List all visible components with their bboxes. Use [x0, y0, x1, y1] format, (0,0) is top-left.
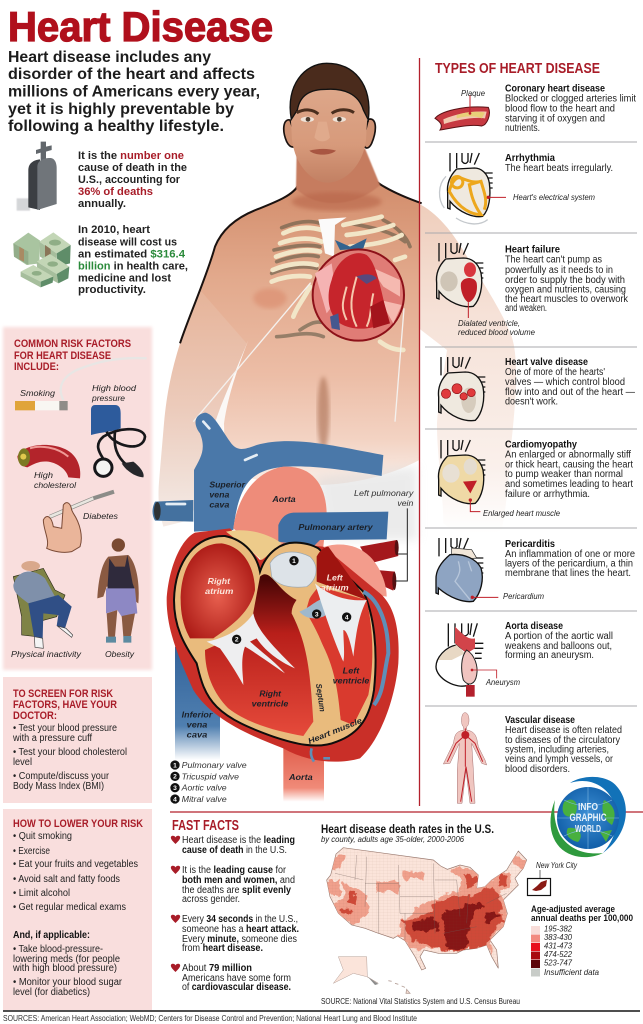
icon: hand with syringe: [43, 492, 114, 552]
panel: screening for risk factors: [3, 677, 152, 803]
heart muscle wall: [174, 536, 376, 746]
item: pericarditis: [436, 538, 635, 602]
intro paragraph: [8, 49, 260, 135]
numbered valve markers: 3: [315, 611, 319, 618]
item: heart valve disease: flow into and out of the heart —: [505, 387, 635, 398]
fact: cost of heart disease: In 2010, heart: [78, 224, 150, 236]
fact: men and women: It is the leading cause for: [182, 865, 287, 876]
label: high blood pressure: High blood: [92, 383, 136, 393]
intro paragraph: yet it is highly preventable by: [8, 101, 234, 118]
pulmonary valve: [270, 552, 316, 587]
valve legend: 4: [173, 796, 177, 803]
numbered valve markers: 1: [292, 558, 296, 565]
heading: risk factors: INCLUDE:: [14, 361, 59, 373]
eyebrows and eyes: [297, 110, 354, 155]
county rate regions: [327, 854, 526, 956]
map source: SOURCE: National Vital Statistics System and U.S. Census Bureau: [321, 997, 520, 1006]
coronary veins on right edge: [363, 592, 388, 705]
item: cardiomyopathy: Cardiomyopathy: [505, 440, 577, 451]
anatomy labels: Pulmonary artery: [298, 523, 373, 532]
fact: number one cause of death: It is the number one: [78, 150, 184, 162]
item: cardiomyopathy: [438, 440, 633, 518]
item: coronary heart disease: Plaque: [461, 88, 485, 98]
fact: every 34 seconds: someone has a heart attack.: [182, 924, 299, 935]
icon: stacks of money: [13, 232, 71, 287]
fact: every 34 seconds: from heart disease.: [182, 943, 263, 954]
anatomy labels: Aorta: [271, 495, 296, 504]
icon: clogged artery: [17, 445, 80, 478]
item: coronary heart disease: blood flow to the heart and: [505, 104, 615, 115]
list: screening steps: • Test your blood pressure: [13, 723, 117, 734]
item: cardiomyopathy: Enlarged heart muscle: [483, 508, 560, 518]
lower aorta: [283, 747, 324, 802]
fact: number one cause of death: [78, 150, 187, 210]
list: medical steps: level (for diabetics): [13, 987, 90, 998]
label: dilated ventricle: Dialated ventricle,: [458, 318, 520, 328]
item: vascular disease: system, including arteries,: [505, 745, 609, 756]
item: aorta disease: forming an aneurysm.: [505, 650, 594, 661]
column rule: [418, 58, 420, 806]
item: cardiomyopathy: to pump weaker than normal: [505, 469, 623, 480]
numbered valve markers: 4: [345, 614, 349, 621]
neck: [296, 148, 380, 203]
anatomy labels: vena: [209, 490, 230, 499]
anatomy labels: cava: [209, 500, 230, 509]
anatomy labels: Left: [327, 574, 343, 583]
item: vascular disease: blood disorders.: [505, 764, 570, 775]
list: medical steps: [12, 944, 123, 998]
contiguous states: [327, 848, 527, 970]
item: heart failure: the heart muscles to overwork: [505, 294, 629, 305]
fact: cost of heart disease: [78, 224, 188, 296]
heading: screening: [13, 688, 117, 722]
fact: 79 million: of cardiovascular disease.: [182, 982, 291, 993]
sternum: [318, 217, 347, 257]
right arm: [410, 200, 516, 536]
left atrium: [317, 547, 367, 600]
item: aorta disease: Aorta disease: [505, 621, 563, 632]
sources: SOURCES: American Heart Association; WebMD; Centers for Disease Control and Prevention; National Heart Lung and Blood Institute: [3, 1014, 417, 1023]
intro paragraph: millions of Americans every year,: [8, 84, 260, 100]
pulmonary veins: [360, 540, 399, 591]
panel: common risk factors: [3, 327, 152, 670]
item: heart failure: and weaken.: [505, 303, 547, 314]
label: physical inactivity: Physical inactivity: [11, 649, 82, 659]
item: arrhythmia: [440, 153, 613, 224]
panel: man's torso illustration: [159, 63, 516, 536]
shadow behind the vessels: [317, 467, 417, 540]
list: lifestyle steps: [13, 831, 138, 913]
item: coronary heart disease: starving it of oxygen and: [505, 114, 605, 125]
fact: 79 million: Americans have some form: [182, 973, 291, 984]
fact: every 34 seconds: Every 34 seconds in the U.S.,: [182, 914, 298, 925]
subheading: if applicable: And, if applicable:: [13, 930, 90, 941]
anatomy labels: vein: [397, 498, 414, 508]
aortic valve: [299, 598, 328, 618]
label: high blood pressure: pressure: [91, 393, 125, 403]
label: high cholesterol: cholesterol: [34, 480, 77, 490]
label: diabetes: Diabetes: [83, 511, 119, 521]
face: [290, 88, 368, 183]
list: screening steps: • Compute/discuss your: [13, 771, 110, 782]
panel: how to lower your risk: [3, 809, 152, 1010]
anatomy labels: Left: [343, 666, 360, 675]
anatomy labels: vena: [187, 721, 208, 730]
icon: heart with aneurysm: [436, 623, 497, 697]
valve legend: Mitral valve: [182, 794, 227, 804]
gap between arm and torso: [200, 340, 248, 473]
heart anatomy diagram: [152, 413, 417, 804]
heading: types: TYPES OF HEART DISEASE: [435, 61, 600, 77]
right atrium: [181, 543, 255, 638]
heading: risk factors: [14, 338, 131, 373]
item: vascular disease: Heart disease is often related: [505, 725, 622, 736]
label: smoking: Smoking: [20, 388, 55, 398]
hair: [290, 63, 369, 120]
item: pericarditis: layers of the pericardium, a thin: [505, 559, 633, 570]
anatomy labels: atrium: [321, 583, 349, 592]
item: coronary heart disease: Coronary heart disease: [505, 84, 605, 95]
torso and shoulders: [200, 170, 419, 485]
map legend: [531, 904, 633, 977]
ears: [284, 119, 375, 148]
callout leader lines: [193, 283, 404, 422]
right ventricle: [205, 574, 313, 736]
list: lifestyle steps: • Eat your fruits and vegetables: [13, 859, 138, 870]
left atrium exterior: [320, 545, 387, 597]
icon: heart with enlarged muscle: [438, 440, 485, 512]
fact: number one cause of death: annually.: [78, 198, 126, 210]
label: obesity: Obesity: [105, 649, 135, 659]
fatty tissue at top of heart: [226, 530, 282, 560]
valve legend: [170, 760, 247, 804]
footer rule: [3, 1010, 640, 1012]
icon: heart with highlighted valves: [438, 357, 485, 421]
icon: blood pressure cuff: [91, 405, 145, 477]
valve legend: 2: [173, 774, 177, 781]
fact: every 34 seconds: Every minute, someone dies: [182, 934, 297, 945]
item: pericarditis: An inflammation of one or more: [505, 549, 635, 560]
New York City inset: [528, 861, 578, 896]
item: heart valve disease: One of more of the hearts': [505, 367, 605, 378]
list: screening steps: level: [13, 757, 32, 768]
item: cardiomyopathy: failure or arrhythmia.: [505, 489, 590, 500]
intro paragraph: disorder of the heart and affects: [8, 66, 255, 83]
item: heart failure: The heart can't pump as: [505, 255, 602, 266]
fact: men and women: both men and women, and: [182, 875, 295, 886]
list: screening steps: [12, 723, 127, 792]
valve legend: Tricuspid valve: [182, 771, 239, 781]
list: lifestyle steps: • Exercise: [13, 846, 50, 857]
state borders: [335, 855, 507, 940]
fact: cost of heart disease: medicine and lost: [78, 272, 171, 284]
heart outer wall: [167, 528, 399, 762]
dark red counties: [412, 903, 500, 950]
county texture overlay: [327, 848, 527, 970]
list: lifestyle steps: • Quit smoking: [13, 831, 72, 842]
anatomy labels: [182, 480, 414, 782]
light red county bands: [327, 854, 526, 956]
fact: cost of heart disease: billion in health care,: [78, 260, 188, 272]
map legend: Insufficient data: [544, 967, 599, 977]
left ventricle: [307, 585, 372, 725]
heading: fast facts: FAST FACTS: [172, 818, 239, 834]
item: heart failure: [436, 243, 629, 337]
valve legend: Aortic valve: [181, 783, 227, 793]
item: arrhythmia: Heart's electrical system: [513, 192, 595, 202]
item: arrhythmia: The heart beats irregularly.: [505, 163, 613, 174]
label: dilated ventricle: reduced blood volume: [458, 327, 535, 337]
list: lifestyle steps: • Get regular medical exams: [13, 902, 126, 913]
item: pericarditis: Pericardium: [503, 591, 544, 601]
item: vascular disease: Vascular disease: [505, 715, 575, 726]
item: heart valve disease: valves — which control blood: [505, 377, 625, 388]
vessels above heart: [335, 238, 367, 250]
valve legend: 1: [173, 762, 177, 769]
list: screening steps: with a pressure cuff: [12, 733, 92, 744]
mitral valve: [315, 583, 367, 662]
anatomy labels: Superior: [209, 480, 246, 489]
list: medical steps: • Monitor your blood sugar: [13, 977, 123, 988]
label: dilated ventricle: [458, 318, 535, 337]
inferior vena cava: [175, 647, 220, 760]
list: medical steps: • Take blood-pressure-: [13, 944, 103, 955]
fact: number one cause of death: U.S., accounting for: [78, 174, 181, 186]
map subtitle: by county, adults age 35-older, 2000-2006: [321, 834, 464, 844]
item: cardiomyopathy: or thick heart, causing the heart: [505, 459, 633, 470]
map legend: 195-382: [544, 924, 572, 934]
item: aorta disease: [436, 621, 613, 697]
logo: Info Graphic World globe: GRAPHIC: [570, 812, 607, 824]
icon: man sitting in armchair: [13, 561, 73, 648]
list: lifestyle steps: • Avoid salt and fatty foods: [13, 874, 120, 885]
icon: human circulatory figure: [443, 713, 487, 803]
title: Heart Disease: [8, 3, 273, 50]
map legend: 474-522: [544, 949, 572, 959]
item: aorta disease: Aneurysm: [485, 677, 520, 687]
fact: cost of heart disease: an estimated $316.4: [78, 248, 186, 260]
fact: men and women: [171, 865, 295, 905]
anatomy labels: Right: [259, 690, 281, 699]
anatomy labels: ventricle: [252, 700, 289, 709]
heading: risk factors: FOR HEART DISEASE: [14, 350, 111, 362]
map legend: 523-747: [544, 958, 572, 968]
item: heart failure: powerfully as it needs to in: [505, 265, 613, 276]
magnified heart circle: [313, 249, 404, 341]
fact: men and women: across gender.: [182, 894, 240, 905]
anatomy labels: cava: [187, 730, 208, 739]
choropleth map of the U.S.: [327, 848, 527, 993]
item: vascular disease: [443, 713, 622, 803]
icon: cigarette and smoke: [15, 358, 147, 410]
heading: risk factors: COMMON RISK FACTORS: [14, 338, 131, 350]
logo: Info Graphic World globe: INFO: [578, 802, 598, 813]
item: heart valve disease: doesn't work.: [505, 396, 558, 408]
item: coronary heart disease: nutrients.: [505, 123, 540, 134]
heading: screening: DOCTOR:: [13, 710, 57, 722]
left arm: [159, 247, 257, 527]
item: heart failure: order to supply the body with: [505, 275, 625, 286]
tricuspid valve: [207, 613, 295, 685]
numbered valve markers: [232, 556, 351, 644]
icon: artery with plaque: [435, 95, 489, 130]
item: aorta disease: A portion of the aortic wall: [505, 631, 613, 642]
pulmonary artery: [278, 512, 388, 547]
label: high cholesterol: High: [34, 470, 53, 480]
logo: Info Graphic World globe: [550, 777, 626, 857]
anatomy labels: Septum: [314, 683, 327, 712]
icon: tombstone: [17, 142, 57, 211]
fact: number one cause of death: cause of death in the: [78, 162, 187, 174]
anatomy labels: Inferior: [182, 711, 213, 720]
superior vena cava and branches: [152, 413, 383, 532]
Alaska: [333, 957, 378, 983]
item: vascular disease: to diseases of the circulatory: [505, 735, 620, 746]
logo: Info Graphic World globe: WORLD: [575, 824, 601, 835]
item: coronary heart disease: [435, 84, 636, 134]
anatomy labels: Aorta: [288, 773, 313, 782]
icon: obese woman: [97, 538, 139, 643]
label: high cholesterol: [34, 470, 77, 490]
fact: every 34 seconds: [171, 914, 299, 954]
medium red counties: [340, 872, 507, 952]
valve legend: Pulmonary valve: [182, 760, 247, 770]
list: lifestyle steps: • Limit alcohol: [13, 888, 70, 899]
item: cardiomyopathy: An enlarged or abnormally stiff: [505, 450, 631, 460]
list: medical steps: with high blood pressure): [12, 963, 117, 974]
item: heart failure: oxygen and nutrients, causing: [505, 285, 626, 296]
icon: heart with pericardium: [436, 538, 498, 602]
panel: types of heart disease: [425, 61, 637, 803]
item: pericarditis: Pericarditis: [505, 539, 555, 550]
septum: [292, 580, 341, 727]
ribcage: [272, 217, 410, 350]
intro paragraph: following a healthy lifestyle.: [8, 118, 224, 135]
item: aorta disease: weakens and balloons out,: [504, 641, 612, 652]
New York City inset: New York City: [536, 861, 578, 870]
fact: number one cause of death: 36% of deaths: [78, 186, 153, 198]
heading: lower risk: HOW TO LOWER YOUR RISK: [13, 818, 143, 830]
fact: men and women: the deaths are split evenly: [182, 885, 291, 896]
list: medical steps: lowering meds (for people: [13, 954, 120, 965]
fact: leading cause: [171, 835, 295, 856]
icon: heart with electrical system: [440, 153, 506, 224]
label: high blood pressure: [91, 383, 136, 403]
item: coronary heart disease: Blocked or clogged arteries limit: [505, 94, 636, 105]
fact: cost of heart disease: productivity.: [78, 284, 146, 296]
item: arrhythmia: Arrhythmia: [505, 153, 555, 164]
fact: 79 million: [171, 963, 291, 993]
numbered valve markers: 2: [235, 637, 239, 644]
fact: leading cause: cause of death in the U.S.: [182, 845, 287, 856]
item: heart valve disease: Heart valve disease: [505, 357, 588, 368]
item: heart valve disease: [438, 357, 635, 421]
item: vascular disease: veins and lymph vessels, or: [505, 754, 614, 765]
icon: heart with dilated ventricle: [436, 243, 483, 318]
chest shading: [292, 192, 382, 211]
item: pericarditis: membrane that lines the heart.: [505, 568, 631, 579]
heading: screening: FACTORS, HAVE YOUR: [13, 699, 117, 711]
anatomy labels: Right: [208, 577, 230, 586]
fact: leading cause: Heart disease is the leading: [182, 835, 295, 846]
map legend: 383-430: [544, 932, 572, 942]
map legend: 431-473: [544, 940, 572, 950]
Hawaii: [388, 981, 410, 993]
panel: fast facts: [171, 818, 299, 993]
fact: cost of heart disease: disease will cost us: [78, 236, 177, 248]
panel: death rates map: [321, 824, 633, 1006]
map legend: Age-adjusted average: [531, 904, 615, 915]
anatomy labels: ventricle: [333, 676, 370, 685]
body outline: [180, 170, 422, 343]
leader lines for pulmonary vein: [395, 508, 407, 581]
lower coronary vessels: [311, 748, 330, 762]
anatomy labels: atrium: [205, 587, 233, 596]
anatomy labels: Heart muscle: [307, 716, 364, 746]
anatomy labels: Left pulmonary: [354, 488, 414, 498]
section rule: [170, 811, 643, 813]
heading: screening: TO SCREEN FOR RISK: [13, 688, 113, 700]
upper aorta arch: [233, 467, 327, 557]
Alaska panhandle: [368, 977, 378, 985]
fact: 79 million: About 79 million: [182, 963, 252, 974]
item: heart failure: Heart failure: [505, 245, 560, 256]
map title: Heart disease death rates in the U.S.: [321, 824, 494, 836]
item: cardiomyopathy: and sometimes leading to heart: [505, 479, 633, 490]
list: screening steps: • Test your blood cholesterol: [13, 747, 127, 758]
valve legend: 3: [173, 785, 177, 792]
list: screening steps: Body Mass Index (BMI): [13, 781, 104, 792]
intro paragraph: Heart disease includes any: [8, 49, 211, 66]
